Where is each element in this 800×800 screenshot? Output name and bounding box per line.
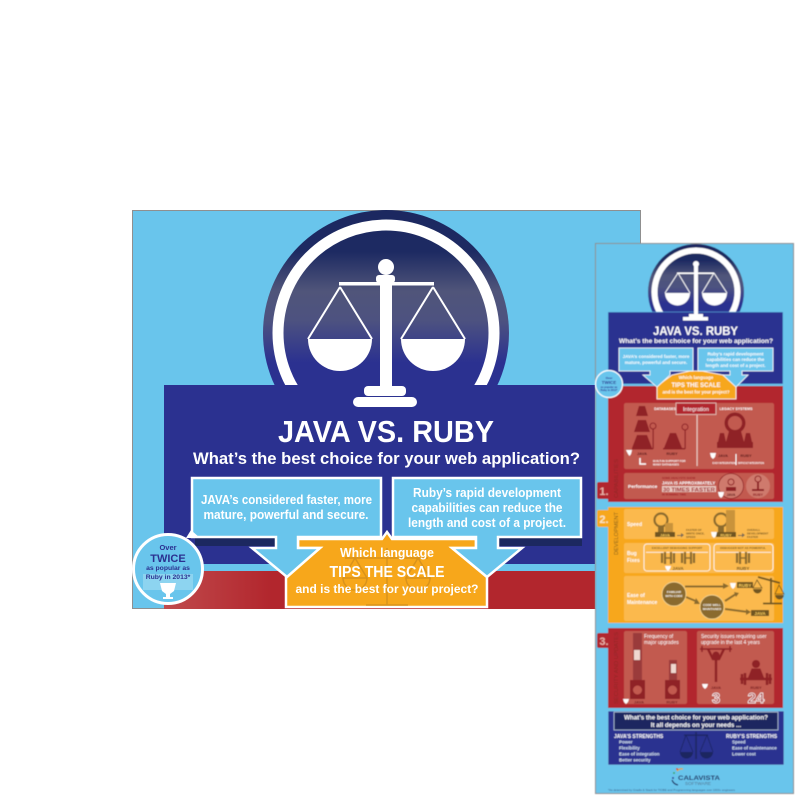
- ease of maintenance row: RUBY: [739, 583, 751, 588]
- ease of maintenance row: JAVA: [754, 611, 766, 616]
- ease of maintenance row: MAINTAINED: [703, 607, 722, 611]
- bug fixes row: JAVA: [672, 566, 684, 571]
- legacy labels: RUBY: [740, 453, 752, 458]
- java strengths: [614, 734, 664, 762]
- tab 3: [597, 633, 612, 648]
- icon: ruby weight: [663, 424, 688, 456]
- icon: tipped scale: [753, 577, 784, 604]
- legacy labels: DIFFICULT INTEGRATION: [738, 461, 764, 465]
- title: JAVA VS. RUBY: [278, 414, 494, 449]
- navy shadow strips: [195, 538, 582, 546]
- performance row: JAVA IS APPROXIMATELY: [662, 480, 715, 486]
- small callout: Ruby: capabilities can reduce the: [707, 357, 765, 362]
- orange question box: and is the best for your project?: [296, 582, 478, 596]
- callout: Ruby: Ruby’s rapid development: [413, 486, 562, 500]
- bug fixes row: DEBUGGER NOT AS POWERFUL: [720, 546, 766, 550]
- orange question box: TIPS THE SCALE: [330, 564, 445, 581]
- small callout: Java: [619, 348, 693, 387]
- note: java integration: MANY DATABASES: [653, 462, 679, 466]
- icon: java lifter: [700, 646, 732, 682]
- callout: Java: mature, powerful and secure.: [204, 508, 368, 522]
- small badge: TWICE: [602, 380, 616, 385]
- small callout: Java: JAVA’s considered faster, more: [623, 354, 690, 359]
- legacy labels: JAVA: [718, 453, 728, 458]
- performance row: [628, 474, 770, 498]
- speed row: SPEED: [686, 535, 695, 539]
- blue title block: [164, 385, 595, 564]
- section 1: capabilities: [597, 403, 774, 499]
- callout: Java: JAVA’s considered faster, more: [201, 493, 372, 507]
- callout: Ruby: [393, 478, 581, 577]
- speed row: WRITE ONCE,: [686, 532, 705, 536]
- ruby strengths: RUBY’S STRENGTHS: [726, 734, 778, 740]
- small callout: Java: mature, powerful and secure.: [625, 360, 687, 365]
- summary question: [614, 712, 778, 730]
- security issues chart: JAVA: [711, 685, 721, 690]
- performance row: SOME ANALYSTS SHOW: [662, 476, 696, 480]
- security issues chart: [700, 634, 772, 707]
- orange question box: Which language: [340, 546, 434, 560]
- logo: Calavista Software: CALAVISTA: [678, 775, 720, 782]
- red band: [164, 571, 595, 609]
- small subtitle: What’s the best choice for your web application?: [619, 338, 773, 345]
- icon: ruby weight: RUBY: [666, 451, 678, 456]
- frequency chart: [623, 633, 680, 704]
- speed row: DEVELOPMENT: [747, 532, 769, 536]
- frequency chart: major upgrades: [644, 640, 679, 646]
- integration label: Integration: [683, 407, 709, 413]
- small badge: Ruby in 2013*: [600, 388, 618, 392]
- icon: trophy: [626, 450, 632, 456]
- ruby strengths: Ease of maintenance: [732, 746, 777, 750]
- footnote: *As determined by Gradle & Stack for TIOBE and Programming languages over 1000+ engineers: [608, 788, 736, 792]
- legacy labels: EASY INTEGRATION: [712, 461, 736, 465]
- red section background: [608, 386, 783, 502]
- small callout: Ruby: Ruby’s rapid development: [707, 352, 764, 356]
- icon: ruby lifter: [740, 660, 772, 685]
- ease of maintenance row: CODE WELL: [703, 603, 721, 607]
- ease of maintenance row: FAMILIAR: [667, 590, 682, 594]
- security issues chart: 24: [748, 690, 765, 707]
- icon: java weights: JAVA: [637, 451, 647, 456]
- tab 1: [597, 482, 612, 499]
- bug fixes row: [627, 544, 773, 571]
- small orange question box: [657, 371, 736, 399]
- ruby strengths: Speed: [732, 740, 746, 744]
- logo: Calavista Software: SOFTWARE: [685, 781, 711, 786]
- small orange question box: TIPS THE SCALE: [671, 383, 721, 389]
- small badge: as popular as: [601, 385, 618, 389]
- orange question box: [286, 532, 487, 607]
- dome behind scale: [263, 210, 509, 456]
- section 2: development: [597, 507, 784, 623]
- speed row: Speed: [627, 522, 642, 528]
- ease of maintenance row: Ease of: [627, 593, 645, 599]
- performance row: RUBY: [753, 493, 764, 497]
- ease of maintenance row: [627, 577, 784, 619]
- java strengths: JAVA’S STRENGTHS: [614, 734, 664, 740]
- frequency chart: JAVA: [634, 700, 644, 704]
- icon: java weights: [632, 406, 656, 456]
- ease of maintenance row: WITH CODE: [665, 594, 683, 598]
- icon: trophy: [160, 583, 176, 599]
- small callout: Ruby: [698, 348, 773, 387]
- bug fixes row: RUBY: [737, 566, 749, 571]
- summary question: It all depends on your needs ...: [651, 722, 741, 729]
- subtitle: What’s the best choice for your web application?: [193, 449, 580, 468]
- java strengths: Better security: [619, 758, 651, 762]
- icon: dark scale: [680, 732, 713, 759]
- small orange question box: and is the best for your project?: [662, 390, 730, 394]
- capabilities vertical label: CAPABILITIES: [614, 459, 620, 498]
- dome and small scale: [608, 244, 783, 384]
- speed row: FASTER OF: [686, 528, 702, 532]
- badge: popularity: TWICE: [150, 553, 186, 565]
- speed row: OVERALL: [747, 528, 761, 532]
- security issues chart: Security issues requiring user: [701, 634, 767, 640]
- tab 2: [597, 510, 612, 527]
- small orange question box: Which language: [679, 375, 714, 380]
- badge: popularity: Ruby in 2013*: [146, 574, 191, 581]
- note: java integration: [640, 458, 686, 466]
- badge: popularity: [134, 530, 202, 604]
- small callout: Ruby: length and cost of a project.: [705, 363, 766, 368]
- section 3: security and updates: 3.: [599, 636, 609, 648]
- note: java integration: BUILT-IN SUPPORT FOR: [653, 459, 686, 463]
- databases heading: DATABASES: [654, 407, 677, 411]
- icon: balance scale: [308, 259, 465, 407]
- logo: Calavista Software: [672, 768, 720, 786]
- callout: Java: [192, 478, 381, 577]
- legacy systems heading: LEGACY SYSTEMS: [719, 407, 753, 411]
- icon: legacy scale: [717, 412, 753, 448]
- bug fixes row: Fixes: [627, 558, 640, 564]
- java strengths: Flexibility: [619, 746, 640, 750]
- ease of maintenance row: Maintenance: [627, 600, 658, 606]
- security issues chart: upgrade in the last 4 years: [701, 640, 760, 646]
- badge: popularity: as popular as: [146, 565, 190, 572]
- integration label: [676, 403, 716, 414]
- section 2: development: 2.: [599, 514, 609, 526]
- speed row: FASTER: [747, 535, 758, 539]
- java strengths: Ease of integration: [619, 752, 660, 756]
- speed row: [627, 510, 769, 539]
- performance row: IN RUNNING TIME: [662, 492, 686, 496]
- ruby strengths: Lower cost: [732, 752, 756, 756]
- performance row: Performance: [628, 484, 658, 490]
- section 3: security and updates: [597, 628, 783, 708]
- development vertical label: DEVELOPMENT: [614, 511, 620, 555]
- panel: large header preview: [132, 210, 640, 609]
- small title: JAVA VS. RUBY: [653, 324, 738, 338]
- callout: Ruby: length and cost of a project.: [408, 516, 566, 530]
- summary question: What’s the best choice for your web application?: [624, 714, 768, 722]
- performance row: 30 TIMES FASTER: [663, 488, 715, 494]
- java strengths: Power: [619, 740, 633, 744]
- speed row: JAVA: [660, 532, 670, 537]
- panel: full infographic thumbnail: [596, 244, 794, 794]
- summary block: [608, 711, 784, 765]
- speed row: RUBY: [720, 532, 732, 537]
- frequency chart: RUBY: [666, 700, 678, 704]
- bug fixes row: EXCELLENT DEBUGGING SUPPORT: [652, 546, 703, 550]
- ruby strengths: [726, 734, 778, 756]
- security issues chart: RUBY: [750, 685, 762, 690]
- security vertical label: SECURITY AND UPDATES: [614, 632, 620, 704]
- section 1: capabilities: 1.: [599, 486, 609, 498]
- bug fixes row: Bug: [627, 551, 637, 557]
- callout: Ruby: capabilities can reduce the: [412, 501, 563, 515]
- legacy labels: [710, 453, 764, 465]
- small badge: [596, 370, 622, 398]
- frequency chart: Frequency of: [644, 634, 674, 640]
- small badge: Over: [606, 376, 613, 380]
- badge: popularity: Over: [159, 543, 177, 552]
- security issues chart: 3: [712, 690, 720, 707]
- performance row: JAVA: [727, 493, 736, 497]
